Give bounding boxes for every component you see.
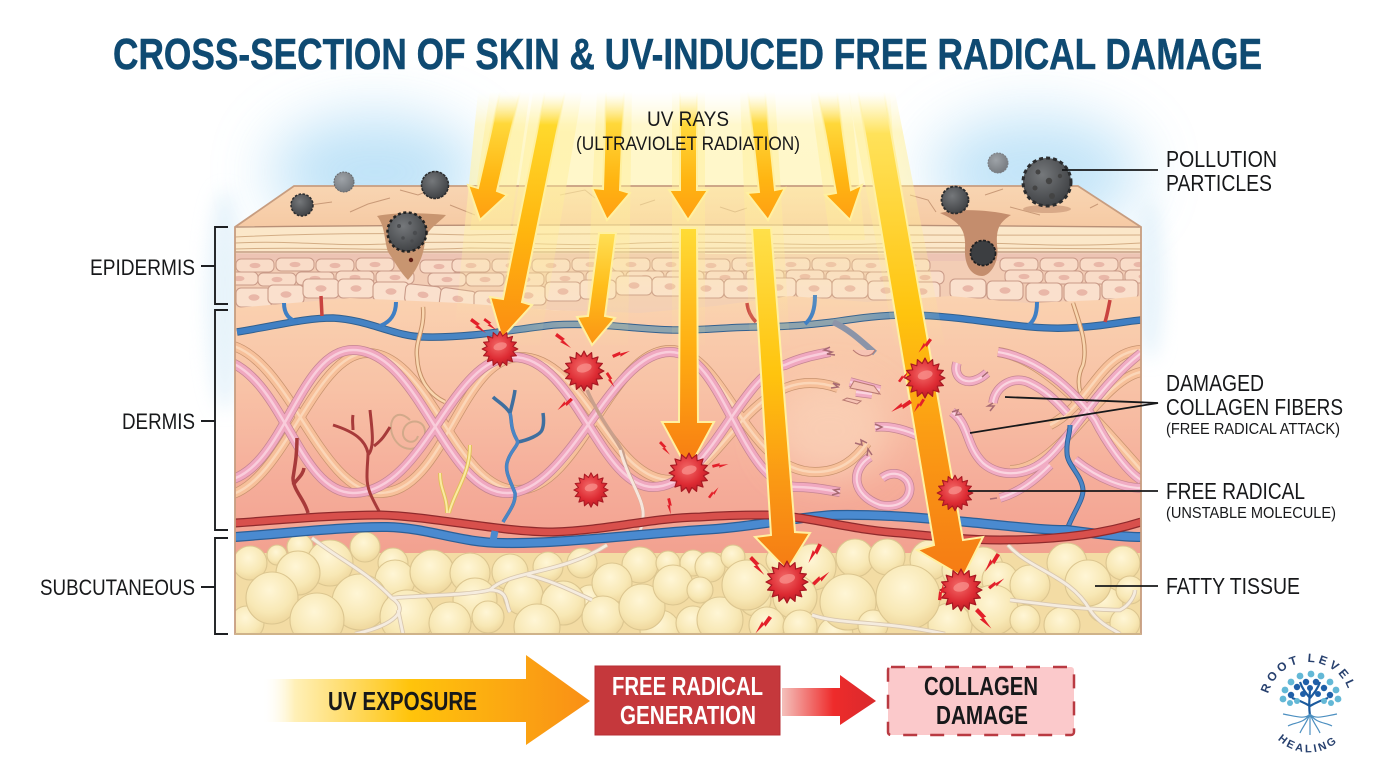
label: dermis: DERMIS [122, 409, 195, 434]
label: damaged collagen fibers: DAMAGED [1166, 370, 1264, 396]
label: damaged collagen fibers: COLLAGEN FIBERS [1166, 394, 1343, 420]
arrow 7 [858, 92, 983, 577]
label: subcutaneous: SUBCUTANEOUS [40, 575, 195, 600]
flow: collagen damage box: DAMAGE [936, 700, 1028, 730]
label: pollution particles: PARTICLES [1166, 170, 1272, 196]
label: free radical: FREE RADICAL [1166, 478, 1305, 504]
flow: collagen damage box [888, 667, 1074, 735]
capillaries and nerves in dermis [293, 390, 1083, 540]
flow: collagen damage box: COLLAGEN [924, 671, 1038, 701]
pale beams around UV arrows [470, 92, 945, 345]
background glow [207, 116, 1164, 410]
arrow 6 [818, 92, 862, 220]
logo: Root Level Healing: HEALING [1278, 734, 1336, 752]
label: damaged collagen fibers [1166, 370, 1343, 438]
leader lines [968, 170, 1158, 586]
pollution pit right [940, 210, 1011, 276]
label: free radical: (UNSTABLE MOLECULE) [1166, 505, 1336, 522]
arrow 4 lower [662, 228, 714, 470]
block outline [235, 186, 1141, 634]
damaged collagen fibers [824, 347, 1141, 506]
collagen fibers intact [230, 345, 1141, 495]
UV rays label: UV RAYS [647, 108, 729, 131]
logo: Root Level Healing [1260, 654, 1354, 752]
arrow 5 upper [747, 92, 785, 220]
arrow 3 upper [592, 92, 630, 220]
flow: free radical generation box [595, 666, 780, 735]
pollution particles [291, 153, 1071, 266]
arrow 5 lower [752, 228, 810, 570]
free radicals [482, 331, 982, 611]
UV light beam [455, 92, 905, 325]
flow: free radical generation box: FREE RADICAL [612, 671, 763, 701]
flow: red arrow [782, 675, 876, 725]
arrow 2 [490, 92, 565, 338]
flow: free radical generation box: GENERATION [620, 700, 756, 730]
keratinocyte cells [220, 253, 1163, 314]
stratum corneum [235, 225, 1141, 254]
skin surface shadow under particle [1023, 205, 1071, 213]
arrow 4 upper [669, 92, 708, 220]
label: pollution particles: POLLUTION [1166, 146, 1277, 172]
UV arrows [468, 92, 983, 577]
energy sparks [470, 318, 1004, 633]
arrow 1 [468, 92, 520, 220]
UV rays label: (ULTRAVIOLET RADIATION) [576, 134, 800, 155]
flow: UV exposure arrow: UV EXPOSURE [328, 686, 477, 716]
subcutaneous fat layer [236, 532, 1140, 633]
logo: Root Level Healing: ROOT LEVEL [1260, 654, 1354, 693]
pollution pit left [377, 213, 446, 280]
label: free radical [1166, 478, 1336, 522]
UV rays label [576, 108, 800, 155]
skin surface [235, 186, 1141, 227]
nerve coil [391, 415, 425, 449]
dermis [235, 295, 1141, 560]
upper blood vessel [237, 295, 1141, 405]
main blood vessels [235, 515, 1141, 543]
label: damaged collagen fibers: (FREE RADICAL ATTACK) [1166, 421, 1340, 438]
label: fatty tissue: FATTY TISSUE [1166, 573, 1300, 599]
skin cross-section block [220, 186, 1163, 653]
flow: UV exposure arrow [262, 655, 590, 745]
label: pollution particles [1166, 146, 1277, 196]
arrow 3 lower [577, 233, 616, 345]
label: epidermis: EPIDERMIS [90, 255, 195, 280]
layer brackets [201, 227, 228, 634]
